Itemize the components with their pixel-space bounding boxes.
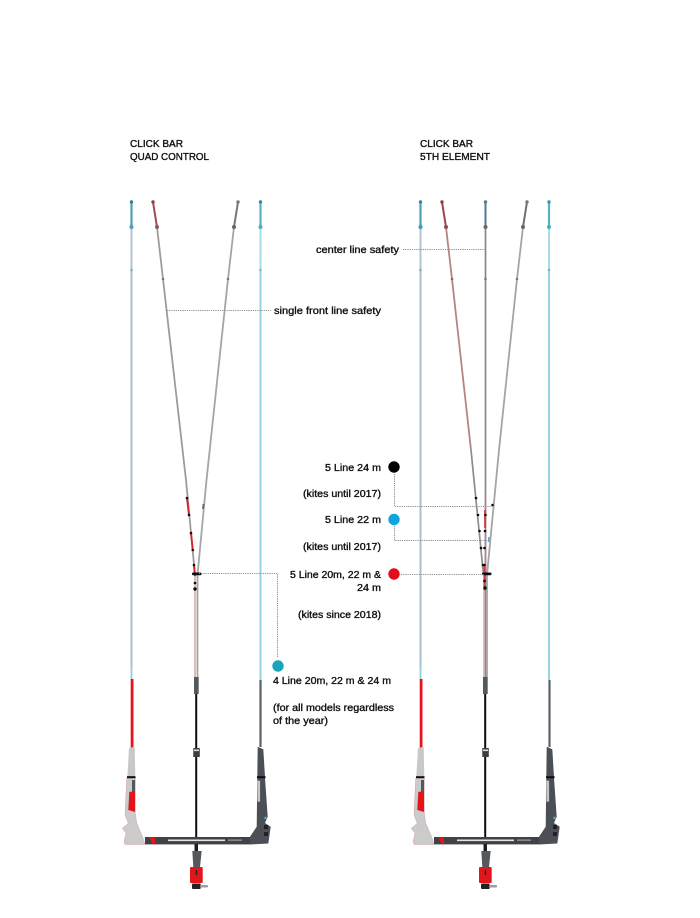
- front line red side: [151, 200, 195, 677]
- red pigtail section: [484, 510, 486, 590]
- right bar end: [539, 747, 560, 844]
- left bar end: [411, 747, 434, 844]
- dotted leader: 5 line 20/22/24 m: [401, 574, 484, 576]
- heading: click bar quad control: [130, 139, 209, 163]
- right outer line: [258, 200, 262, 680]
- label: single front line safety: single front line safety: [274, 306, 381, 317]
- dotted leader: 4 line setup: [199, 574, 278, 658]
- center line: [482, 677, 489, 837]
- label: 4 line lengths: 4 Line 20m, 22 m & 24 m: [273, 676, 391, 687]
- label: 5 line 20/22/24 m: (kites since 2018): [298, 610, 381, 621]
- right steering line: [259, 680, 262, 747]
- right bar end: [250, 747, 271, 844]
- dotted leader: 5 line 22 m: [394, 526, 488, 540]
- heading: click bar quad control: CLICK BAR: [130, 139, 183, 150]
- dot: 5 line 20/22/24 m: [388, 568, 400, 580]
- label: 5 line 20/22/24 m: [290, 570, 381, 621]
- diagram: quad control lines: [130, 200, 262, 680]
- control bar: quad control: [122, 677, 271, 889]
- front line red side: [440, 200, 484, 677]
- heading: click bar 5th element: [420, 139, 490, 163]
- right steering line: [548, 680, 551, 747]
- right outer line: [547, 200, 551, 680]
- label: 5 line 24 m: 5 Line 24 m: [325, 463, 381, 474]
- control bar: 5th element: [411, 677, 560, 889]
- left outer line: [130, 200, 134, 680]
- horizontal bar: [145, 837, 250, 844]
- heading: click bar 5th element: CLICK BAR: [420, 139, 473, 150]
- label: 5 line 24 m: (kites until 2017): [303, 489, 381, 500]
- front line grey side: [487, 200, 529, 677]
- red release: [479, 844, 497, 889]
- heading: click bar 5th element: 5TH ELEMENT: [420, 152, 490, 163]
- label: 5 line 22 m: (kites until 2017): [303, 542, 381, 553]
- center safety line: [484, 200, 488, 677]
- dot: 5 line 24 m: [388, 461, 400, 473]
- label: 5 line 22 m: [303, 515, 381, 553]
- front line grey side: [198, 200, 240, 677]
- left bar end: [122, 747, 145, 844]
- left steering line: [420, 679, 422, 748]
- dot: 4 line: [272, 660, 284, 672]
- label: center line safety: center line safety: [316, 245, 399, 256]
- label: 4 line lengths: (for all models regardless: [273, 703, 394, 714]
- label: 5 line 22 m: 5 Line 22 m: [325, 515, 381, 526]
- heading: click bar quad control: QUAD CONTROL: [130, 152, 209, 163]
- dotted leader: center line safety: [403, 248, 485, 250]
- pigtail knots: [186, 497, 202, 591]
- pigtail knots: [475, 497, 494, 590]
- center line: [193, 677, 200, 837]
- dot: 5 line 22 m: [388, 514, 400, 525]
- label: 4 line lengths: [273, 676, 394, 727]
- dotted leader: single front line safety: [167, 310, 271, 312]
- horizontal bar: [434, 837, 539, 844]
- label: 5 line 24 m: [303, 463, 381, 500]
- label: 5 line 20/22/24 m: 24 m: [357, 583, 381, 594]
- diagram: 5th element lines: [418, 200, 551, 680]
- left steering line: [131, 679, 134, 748]
- label: 5 line 20/22/24 m: 5 Line 20m, 22 m &: [290, 570, 381, 581]
- red release: [190, 844, 208, 889]
- label: 4 line lengths: of the year): [273, 716, 328, 727]
- dotted leader: 5 line 24 m: [394, 474, 492, 506]
- left outer line: [418, 200, 422, 680]
